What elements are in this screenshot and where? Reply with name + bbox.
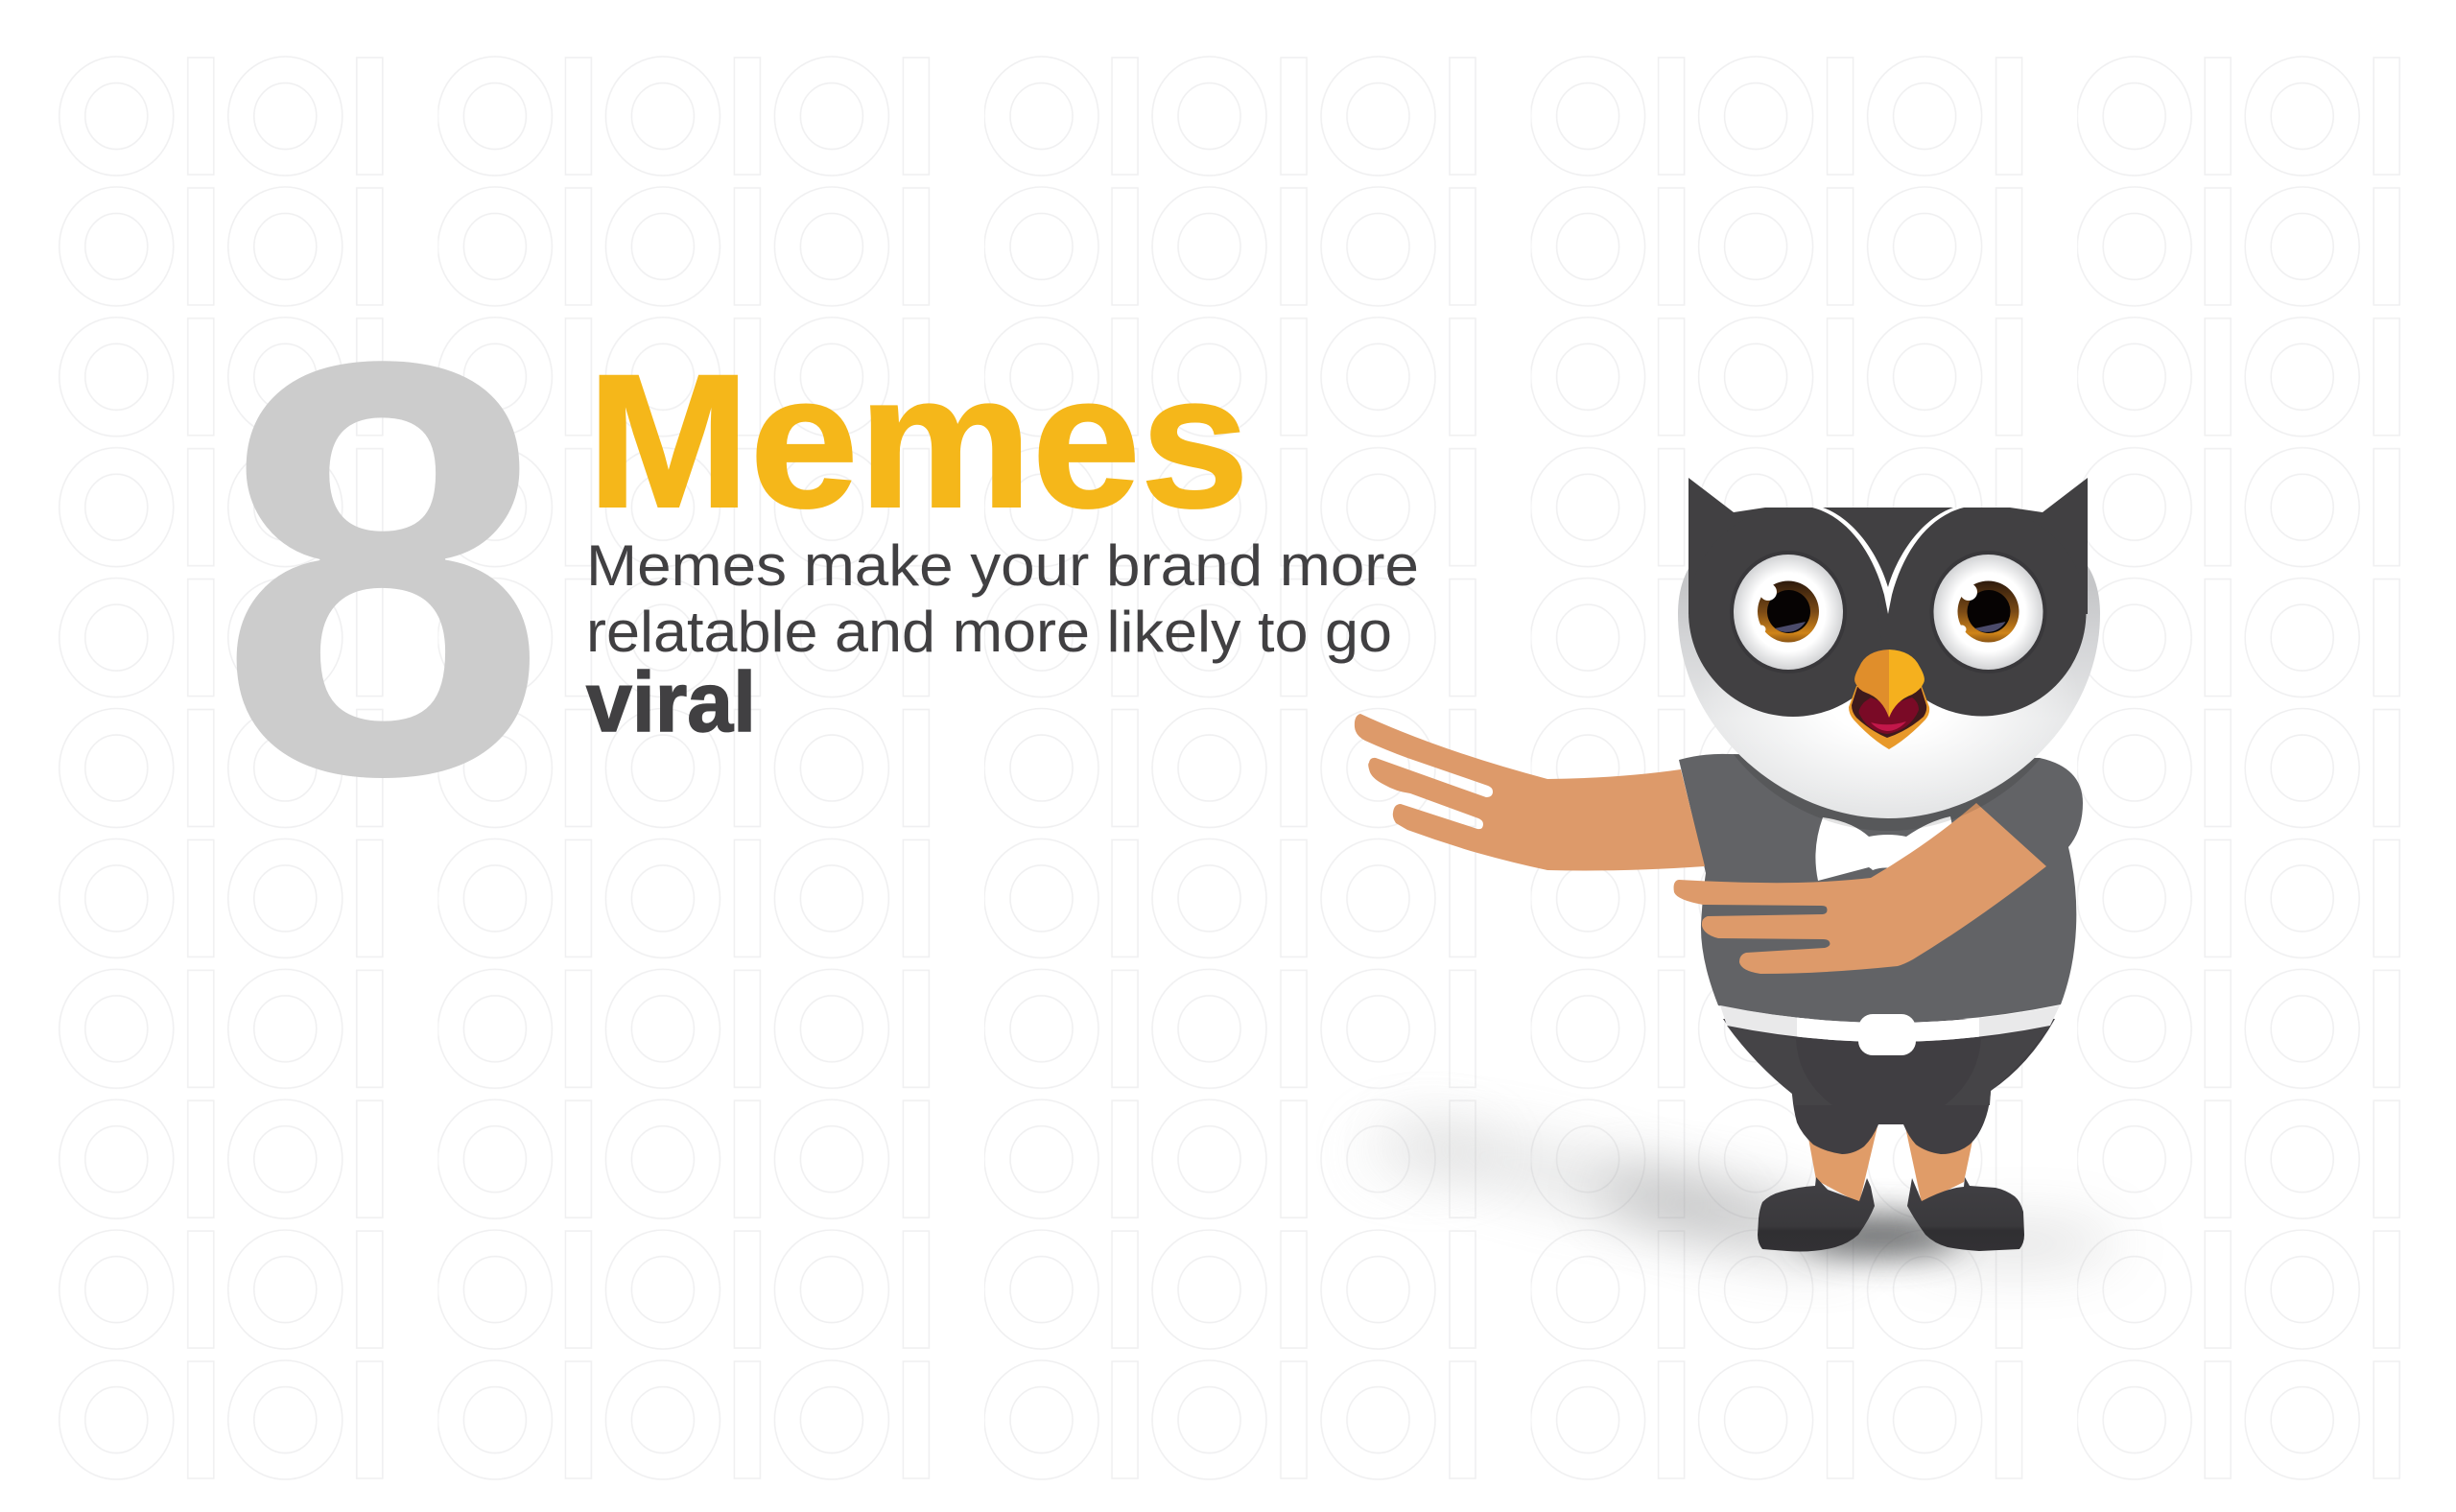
pointing arm and hand [1355, 714, 1705, 871]
open mouth [1849, 686, 1929, 749]
owl mascot [1355, 478, 2100, 1251]
shorts side shading [1727, 1026, 1832, 1105]
belt buckle [1858, 1014, 1916, 1055]
tongue [1859, 697, 1919, 734]
owl torso [1679, 754, 2083, 1023]
left eye [1730, 551, 1847, 673]
big number 8: 8 [218, 240, 548, 898]
heading: Memes: Memes [587, 335, 1249, 547]
head shadow on body [1734, 754, 2041, 831]
body text [586, 533, 1419, 749]
owl bow tie [1815, 816, 1957, 881]
owl head [1678, 478, 2100, 818]
body text: viral [586, 654, 756, 749]
owl belt [1720, 1005, 2060, 1055]
arm across chest [1674, 803, 2046, 974]
owl ground shadow [1362, 1110, 2120, 1271]
beak [1854, 650, 1925, 718]
body text: Memes make your brand more [586, 533, 1419, 598]
owl shorts [1723, 1019, 2055, 1154]
owl shoes [1758, 1177, 2024, 1251]
dark mask with ears [1688, 478, 2088, 717]
white brow lines [1812, 508, 1964, 614]
right eye [1930, 551, 2047, 673]
body text: relatable and more likely to go [586, 600, 1392, 664]
owl legs [1806, 1122, 1976, 1203]
